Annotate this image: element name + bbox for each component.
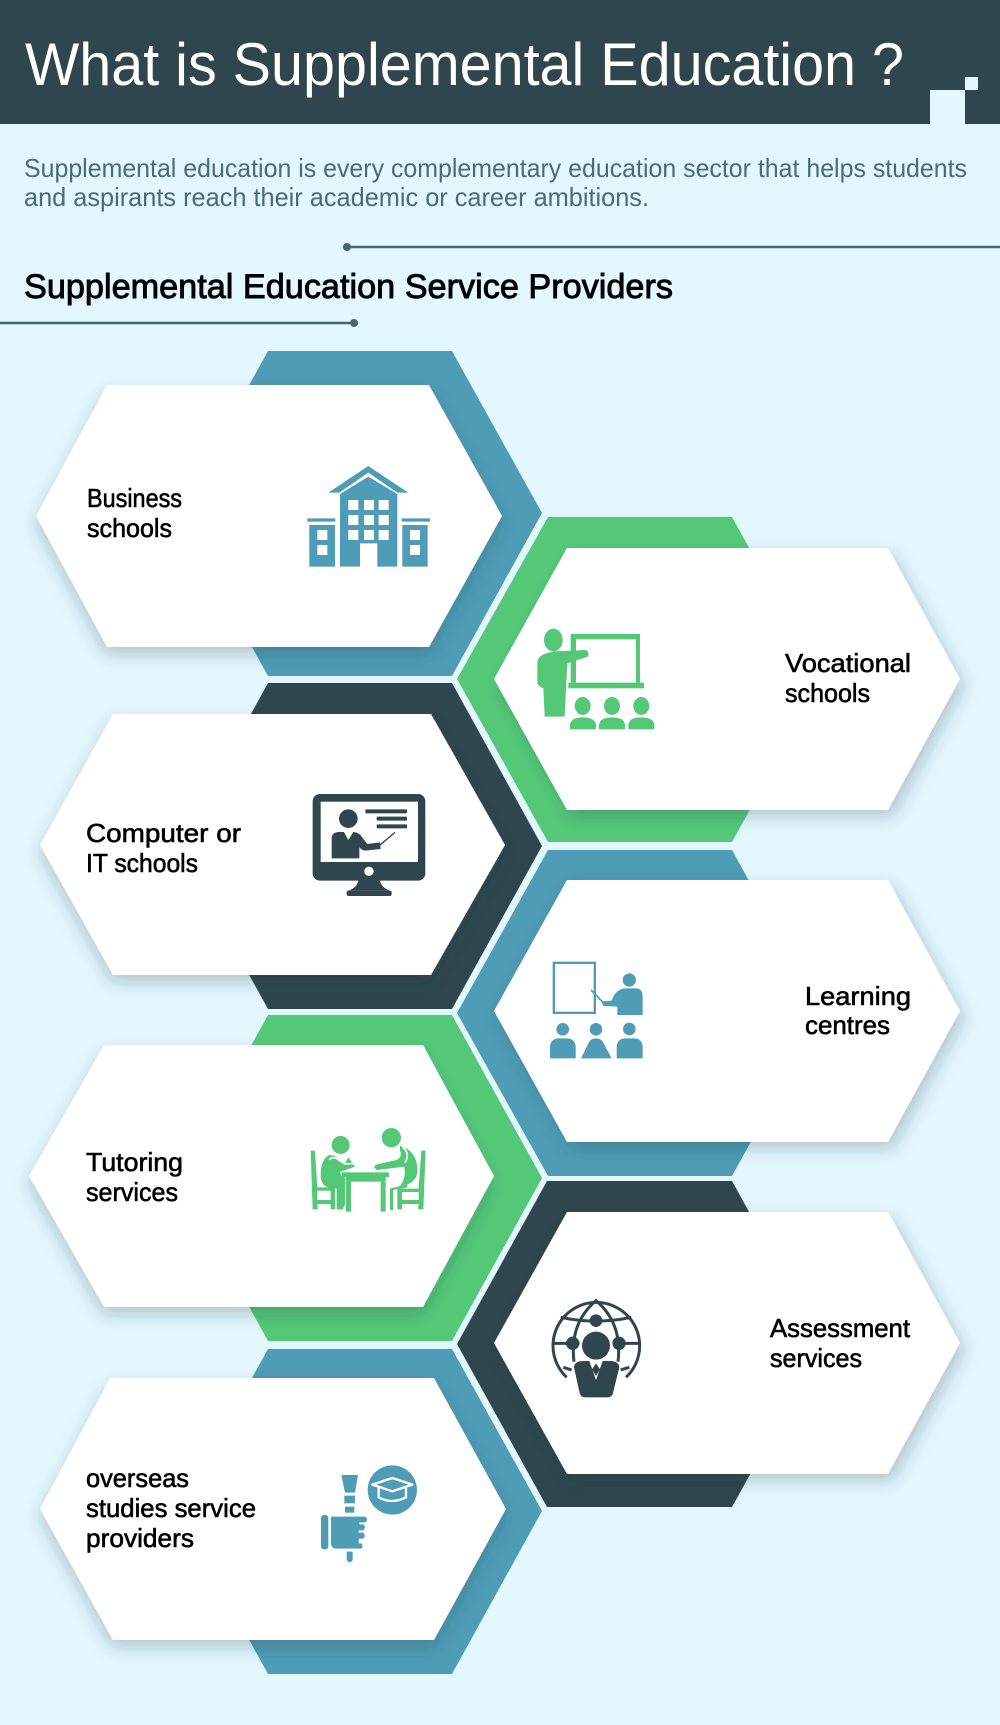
label: vocational schools: schools [785,678,870,708]
header banner [0,0,1000,124]
label: computer or IT schools: IT schools [86,848,198,878]
label: assessment services: services [770,1343,862,1373]
label: tutoring services [86,1147,183,1207]
label: overseas studies service providers: overseas [86,1463,189,1493]
label: business schools [87,483,182,543]
intro text: and aspirants reach their academic or career ambitions. [24,182,649,212]
icon: classroom presenter [550,963,643,1058]
panel: overseas studies service providers [40,1349,542,1674]
label: business schools: schools [87,513,172,543]
label: overseas studies service providers: providers [86,1523,194,1553]
divider bottom [0,319,358,327]
label: tutoring services: services [86,1177,178,1207]
intro text: Supplemental education is every complementary education sector that helps students [24,153,967,183]
label: learning centres: centres [805,1010,890,1040]
label: vocational schools [785,648,911,708]
label: assessment services [770,1313,911,1373]
label: overseas studies service providers [86,1463,256,1553]
divider top [343,243,1000,251]
label: assessment services: Assessment [770,1313,911,1343]
label: computer or IT schools: Computer or [86,818,241,848]
label: learning centres: Learning [805,981,911,1011]
panel: computer or IT schools [40,683,542,1009]
title: What is Supplemental Education ? [25,31,904,98]
panel: tutoring services [29,1015,542,1341]
panel: learning centres [457,850,960,1176]
panel: vocational schools [457,517,960,842]
section heading: Supplemental Education Service Providers [24,268,673,306]
icon: exclamation hand and graduation cap [321,1465,417,1562]
label: learning centres [805,981,911,1040]
icon: school building [307,466,430,567]
intro text [24,153,967,212]
panel: assessment services [457,1181,960,1507]
icon: teacher at board [537,629,654,729]
icon: global assessor [553,1301,640,1397]
icon: online teaching monitor [313,794,425,896]
icon: tutor and student at table [311,1128,426,1212]
label: tutoring services: Tutoring [86,1147,183,1177]
panel: business schools [36,351,542,676]
label: computer or IT schools [86,818,241,878]
label: vocational schools: Vocational [785,648,911,678]
label: overseas studies service providers: studies service [86,1493,256,1523]
label: business schools: Business [87,483,182,513]
